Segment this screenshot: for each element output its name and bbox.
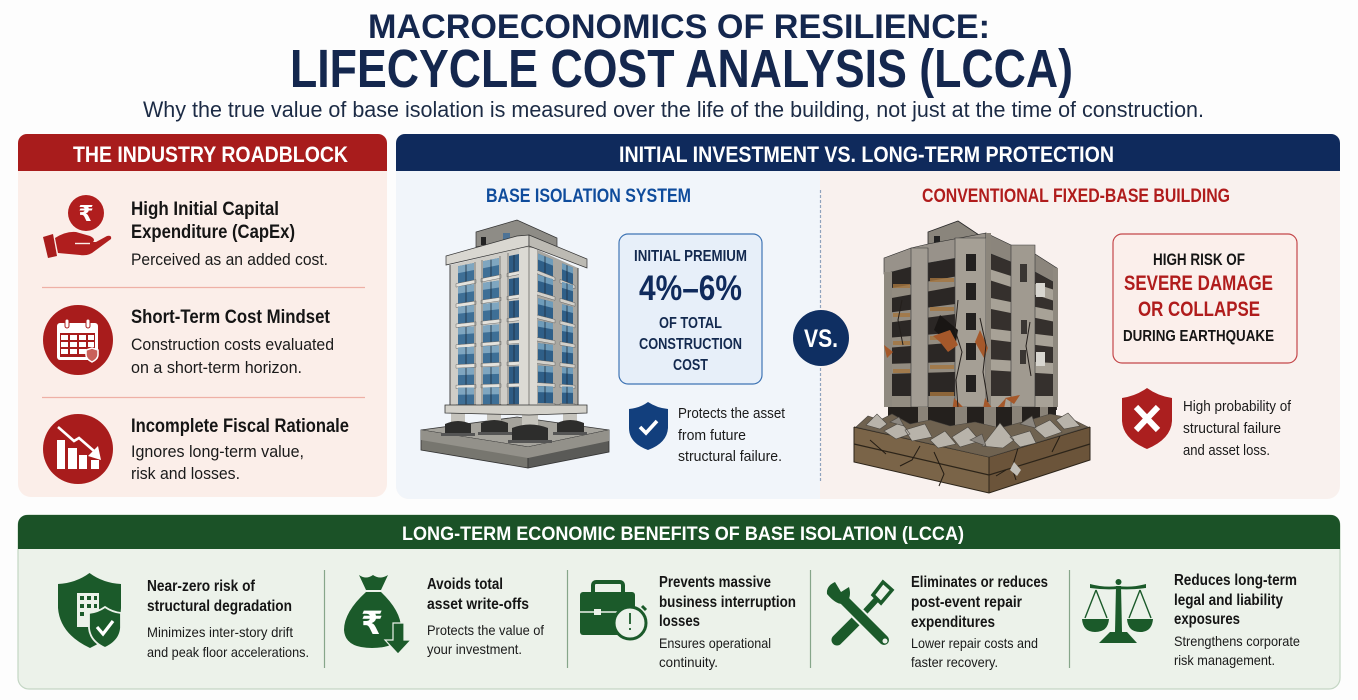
conventional building heading: CONVENTIONAL FIXED-BASE BUILDING — [922, 186, 1230, 207]
callout: high risk: OR COLLAPSE — [1138, 298, 1260, 321]
benefit: business interruption: losses — [659, 613, 700, 630]
benefit: business interruption: continuity. — [659, 654, 718, 670]
benefit: structural degradation: and peak floor accelerations. — [147, 644, 309, 660]
benefit: legal and liability: Strengthens corporate — [1174, 633, 1300, 649]
callout: initial premium — [619, 234, 762, 384]
callout: initial premium: INITIAL PREMIUM — [634, 248, 747, 265]
icon: shield with building — [58, 573, 121, 648]
roadblock item: short-term mindset: Construction costs evaluated — [131, 335, 334, 354]
title: MACROECONOMICS OF RESILIENCE: — [368, 8, 990, 46]
benefit: repair expenditures: post-event repair — [911, 594, 1022, 611]
conventional building note: and asset loss. — [1183, 442, 1270, 459]
callout: high risk: SEVERE DAMAGE — [1124, 272, 1273, 295]
conventional building note: High probability of — [1183, 398, 1292, 415]
benefit: structural degradation: structural degradation — [147, 598, 292, 615]
panel: the industry roadblock — [18, 134, 387, 497]
roadblock item: fiscal rationale — [131, 416, 349, 483]
roadblock item: capex — [131, 199, 328, 269]
base isolation heading: BASE ISOLATION SYSTEM — [486, 186, 691, 207]
base isolation note: Protects the asset — [678, 405, 786, 422]
panel: long-term economic benefits — [18, 515, 1340, 689]
roadblock item: fiscal rationale: Incomplete Fiscal Rationale — [131, 416, 349, 437]
roadblock item: capex: High Initial Capital — [131, 199, 279, 220]
benefit: repair expenditures: Lower repair costs and — [911, 635, 1038, 651]
icon: hand holding rupee coin — [43, 195, 111, 258]
title: LIFECYCLE COST ANALYSIS (LCCA) — [290, 39, 1073, 99]
icon: money bag with down arrow — [344, 575, 411, 654]
benefit: asset write-offs: Protects the value of — [427, 622, 544, 638]
roadblock item: short-term mindset — [131, 307, 334, 377]
benefit: business interruption: Prevents massive — [659, 574, 771, 591]
benefit: repair expenditures: expenditures — [911, 614, 995, 631]
callout: initial premium: OF TOTAL — [659, 315, 722, 332]
callout: initial premium: CONSTRUCTION — [639, 336, 742, 353]
icon: scales of justice — [1082, 579, 1153, 643]
benefit: legal and liability: legal and liability — [1174, 592, 1283, 609]
benefit: business interruption — [659, 574, 796, 670]
roadblock item: short-term mindset: on a short-term horizon. — [131, 358, 302, 377]
callout: high risk: DURING EARTHQUAKE — [1123, 328, 1274, 345]
conventional building note — [1183, 398, 1292, 459]
benefits heading: LONG-TERM ECONOMIC BENEFITS OF BASE ISOLATION (LCCA) — [402, 524, 964, 545]
panel: initial investment vs long-term protection — [396, 134, 1340, 499]
roadblock heading — [18, 134, 387, 171]
benefit: asset write-offs: your investment. — [427, 641, 522, 657]
base isolation note: from future — [678, 427, 746, 444]
icon: blue shield with check — [629, 402, 668, 450]
benefit: structural degradation — [147, 578, 309, 660]
comparison heading: INITIAL INVESTMENT VS. LONG-TERM PROTECTION — [619, 142, 1114, 167]
subtitle: Why the true value of base isolation is measured over the life of the building, not just at the time of construction. — [143, 97, 1204, 122]
roadblock item: short-term mindset: Short-Term Cost Mindset — [131, 307, 331, 328]
benefit: business interruption: business interruption — [659, 594, 796, 611]
icon: briefcase with stopwatch — [580, 582, 646, 639]
title — [290, 8, 1073, 99]
badge: vs: VS. — [804, 325, 838, 353]
icon: falling bar chart — [43, 414, 113, 484]
roadblock item: capex: Expenditure (CapEx) — [131, 222, 295, 243]
benefit: repair expenditures — [911, 574, 1048, 670]
callout: initial premium: COST — [673, 357, 708, 374]
illustration: base-isolated building — [421, 220, 609, 468]
benefit: asset write-offs: asset write-offs — [427, 596, 529, 613]
base isolation note: structural failure. — [678, 448, 782, 465]
roadblock item: fiscal rationale: risk and losses. — [131, 464, 240, 483]
icon: calendar — [43, 305, 113, 375]
roadblock heading: THE INDUSTRY ROADBLOCK — [73, 142, 348, 167]
base isolation note — [678, 405, 786, 465]
benefit: legal and liability: risk management. — [1174, 652, 1275, 668]
comparison heading — [396, 134, 1340, 171]
badge: vs — [793, 310, 849, 366]
benefit: legal and liability: Reduces long-term — [1174, 572, 1297, 589]
benefit: repair expenditures: Eliminates or reduces — [911, 574, 1048, 591]
icon: money bag with down arrow: ₹ — [361, 604, 383, 642]
benefit: structural degradation: Near-zero risk of — [147, 578, 256, 595]
benefit: repair expenditures: faster recovery. — [911, 654, 998, 670]
callout: high risk: HIGH RISK OF — [1153, 250, 1245, 269]
icon: red shield with cross — [1122, 388, 1172, 449]
benefits heading — [18, 515, 1340, 549]
benefit: legal and liability — [1174, 572, 1300, 668]
benefit: structural degradation: Minimizes inter-story drift — [147, 624, 293, 640]
conventional building note: structural failure — [1183, 420, 1281, 437]
benefit: business interruption: Ensures operational — [659, 635, 771, 651]
benefit: asset write-offs — [427, 576, 544, 657]
callout: high risk — [1113, 234, 1297, 363]
benefit: asset write-offs: Avoids total — [427, 576, 503, 593]
benefit: legal and liability: exposures — [1174, 611, 1240, 628]
roadblock item: fiscal rationale: Ignores long-term value, — [131, 442, 304, 461]
icon: hand holding rupee coin: ₹ — [78, 202, 94, 227]
roadblock item: capex: Perceived as an added cost. — [131, 250, 328, 269]
illustration: damaged conventional building — [854, 221, 1090, 493]
callout: initial premium: 4%–6% — [639, 269, 742, 308]
icon: wrench and screwdriver — [827, 582, 892, 644]
